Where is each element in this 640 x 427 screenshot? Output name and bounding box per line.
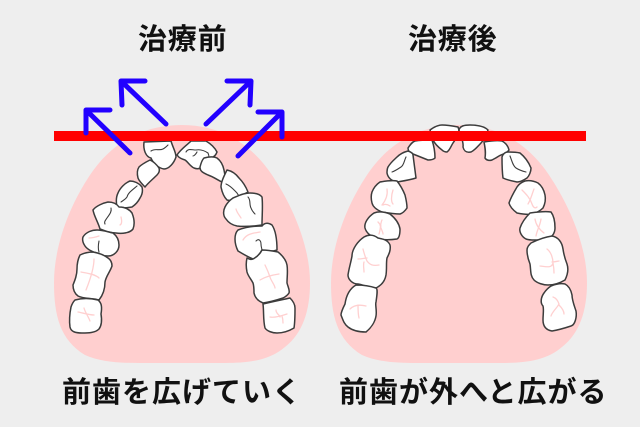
palate: after: [331, 125, 587, 363]
caption: before treatment: 前歯を広げていく: [62, 376, 302, 409]
arrows: expansion direction: [86, 81, 282, 156]
arrow: far left: [86, 110, 130, 153]
panel: before treatment palate and teeth: [54, 125, 310, 363]
teeth: after, lower left: [341, 235, 390, 332]
palate: before: [54, 125, 310, 363]
teeth: before, left side: [70, 141, 176, 333]
reference line: [54, 131, 586, 141]
panel: after treatment palate and teeth: [331, 125, 587, 363]
teeth: after, upper arch: [365, 125, 555, 240]
arrow: inner left: [121, 81, 166, 124]
arrow: inner right: [206, 81, 251, 124]
arrow: far right: [238, 112, 282, 156]
caption: after treatment: 前歯が外へと広がる: [339, 375, 608, 409]
heading: after treatment: 治療後: [408, 23, 497, 56]
heading: before treatment: 治療前: [138, 23, 227, 56]
teeth: before, right side: [177, 141, 295, 333]
teeth: after, lower right: [527, 236, 576, 331]
